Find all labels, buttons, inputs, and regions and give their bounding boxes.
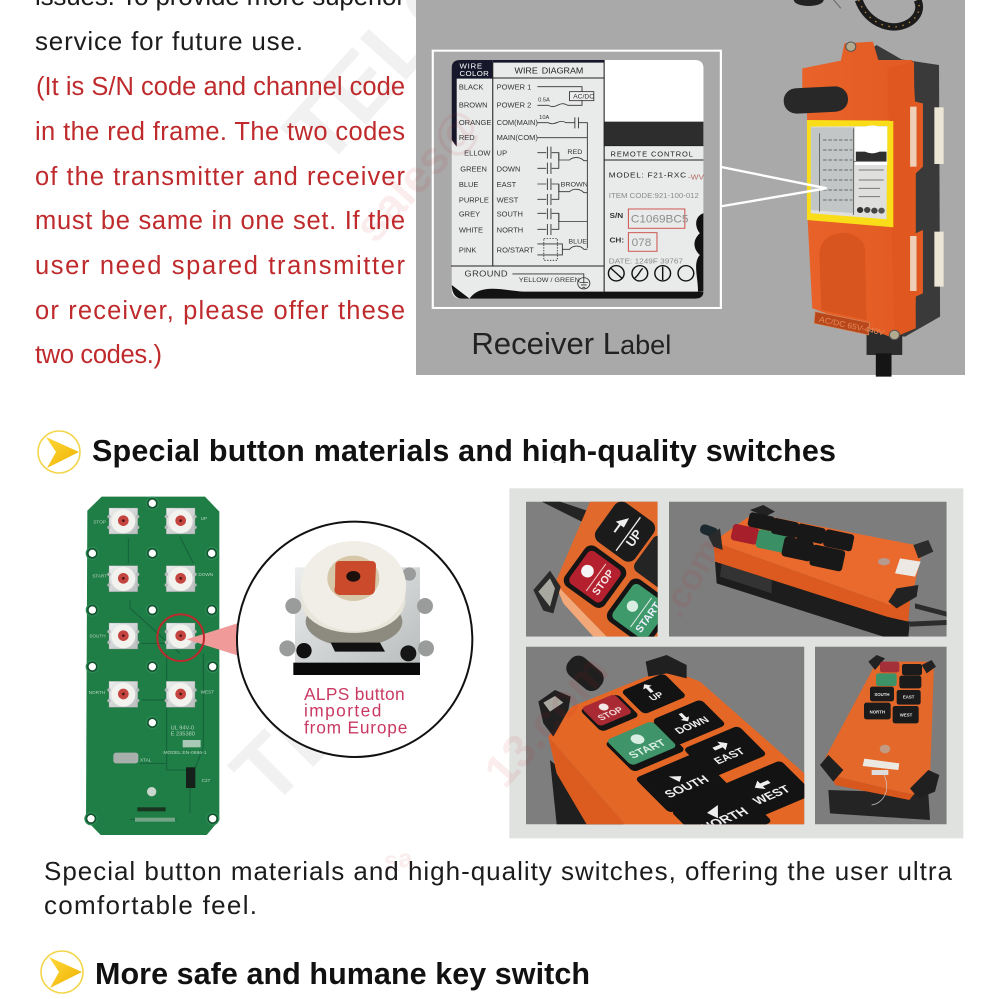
illustration: receiver unit: AC/DC 65V-440V — [818, 315, 886, 338]
callout: enlarged receiver label: 0.5A — [538, 98, 550, 104]
switch labels: XTAL — [140, 758, 152, 763]
icon: yellow arrow bullet — [38, 431, 80, 473]
wire colour list: GREEN — [460, 165, 487, 173]
photo: transmitter keypad angled: STOP — [595, 705, 626, 722]
arrow: callout lines — [719, 167, 827, 207]
photo: close-up of UP STOP START — [526, 502, 658, 637]
switch labels: STOP — [93, 520, 106, 525]
switch labels: NORTH — [89, 690, 105, 695]
photo: transmitter keypad angled: DOWN — [673, 715, 712, 736]
text block: red code note: user need spared transmitter — [35, 252, 406, 280]
function list: RO/START — [497, 246, 534, 254]
wire colour list: ELLOW — [464, 149, 491, 157]
caption: ALPS button — [304, 684, 407, 737]
panel: receiver label — [416, 0, 965, 377]
illustration: receiver unit — [783, 42, 944, 377]
function list: COM(MAIN) — [497, 118, 538, 127]
body text: button description: Special button materials and high-quality switches, offering the user ultra — [44, 856, 953, 886]
icon: coiled antenna cable — [794, 0, 919, 27]
switch labels: SOUTH — [89, 633, 106, 638]
function list: WEST — [497, 196, 519, 204]
highlight: red ring around switch — [157, 614, 204, 661]
text block: red code note: or receiver, please offer these — [35, 297, 405, 325]
photo: transmitter keypad angled: SOUTH — [661, 773, 712, 800]
highlight: S/N code: C1069BC5 — [631, 214, 688, 225]
circuit board — [84, 497, 219, 835]
switch labels: MODEL:EN-0866-1 — [163, 750, 207, 756]
callout: enlarged receiver label: BROWN — [561, 181, 588, 188]
photo: close-up of UP STOP START: STOP — [590, 568, 617, 598]
caption: ALPS button: imported — [304, 701, 381, 721]
wire colour list: BLACK — [459, 83, 484, 92]
wire colour list: ORANGE — [459, 118, 491, 127]
switch labels: UP — [201, 516, 207, 521]
highlight: channel code: 078 — [632, 237, 651, 249]
switch labels: DOWN — [198, 572, 213, 577]
callout: ALPS button magnified — [237, 522, 472, 757]
watermark: 13.com — [474, 644, 619, 797]
callout: enlarged receiver label — [433, 51, 721, 308]
function list: DOWN — [497, 165, 520, 173]
watermark: .com — [651, 531, 729, 624]
watermark — [344, 98, 729, 876]
text block: red code note: of the transmitter and receiver — [35, 163, 406, 191]
callout: enlarged receiver label: MODEL: F21-RXC — [609, 171, 687, 179]
function list: POWER 1 — [497, 83, 531, 92]
callout wedge — [187, 623, 237, 655]
callout: enlarged receiver label: REMOTE CONTROL — [611, 150, 694, 158]
text block: service note: service for future use. — [35, 26, 303, 56]
switch labels — [89, 516, 214, 783]
highlight: yellow frame on unit — [807, 120, 893, 227]
callout: enlarged receiver label: ITEM CODE:921-100-012 — [609, 191, 699, 200]
panel: button photo collage — [509, 488, 963, 849]
watermark: brand mark: TELE — [213, 591, 447, 824]
wiring diagram — [512, 87, 594, 289]
caption: ALPS button: ALPS button — [304, 684, 405, 704]
photo: transmitter keypad angled — [526, 646, 804, 824]
callout: enlarged receiver label: S/N — [609, 211, 623, 220]
photo: transmitter top view — [815, 647, 947, 824]
function list — [497, 83, 538, 254]
text block: red code note: (It is S/N code and channel code — [36, 73, 405, 101]
function list: MAIN(COM) — [497, 133, 538, 142]
text block: red code note: in the red frame. The two codes — [35, 118, 405, 146]
callout: enlarged receiver label: RED — [567, 149, 582, 156]
function list: SOUTH — [497, 210, 523, 219]
certification icons — [608, 266, 694, 281]
switch labels: C27 — [202, 778, 211, 783]
callout: enlarged receiver label: COLOR — [460, 69, 489, 78]
body text: button description — [44, 856, 953, 920]
body text: button description: comfortable feel. — [44, 890, 257, 920]
wire colour list: GREY — [459, 210, 480, 219]
function list: POWER 2 — [497, 101, 531, 110]
switch labels: UL 94V-0 — [171, 725, 194, 731]
wire colour list: BLUE — [459, 180, 479, 189]
text block: red code note — [35, 73, 406, 369]
wire colour list: RED — [459, 133, 475, 142]
photo: transmitter side view — [669, 502, 947, 637]
photo: transmitter keypad angled: NORTH — [697, 805, 751, 834]
watermark: sa — [382, 842, 415, 876]
function list: EAST — [497, 180, 517, 189]
switch labels: START — [92, 574, 107, 579]
photo: transmitter top view: EAST — [903, 694, 915, 699]
heading: safe key switch: More safe and humane key switch — [95, 957, 590, 991]
photo: transmitter keypad angled: EAST — [712, 746, 748, 767]
callout: enlarged receiver label: WIRE — [460, 62, 483, 70]
wire colour list: WHITE — [459, 226, 483, 235]
highlight: S/N code — [628, 209, 688, 228]
text block: service note — [35, 0, 405, 56]
switch labels: E 235380 — [171, 732, 195, 738]
photo: transmitter keypad angled: START — [627, 738, 669, 761]
function list: NORTH — [497, 226, 523, 235]
highlight: channel code — [628, 233, 657, 251]
icon: yellow arrow bullet — [41, 951, 83, 993]
illustration: circuit board with ALPS button — [84, 497, 472, 835]
callout: enlarged receiver label: WIRE DIAGRAM — [515, 66, 583, 75]
wire colour list: PURPLE — [459, 196, 489, 204]
watermark: brand mark — [213, 0, 497, 824]
caption: ALPS button: from Europe — [304, 717, 407, 737]
photo: close-up of UP STOP START: UP — [623, 527, 645, 550]
callout: enlarged receiver label: CH: — [609, 236, 624, 244]
photo: transmitter top view: WEST — [900, 713, 913, 718]
caption: receiver label: Receiver Label — [471, 326, 671, 361]
callout: enlarged receiver label: 10A — [539, 115, 550, 121]
text block: red code note: must be same in one set. If the — [35, 207, 405, 235]
callout: enlarged receiver label: DATE: 1249F 39767 — [609, 257, 684, 265]
wire colour list: BROWN — [459, 101, 488, 110]
callout: enlarged receiver label: GROUND — [465, 269, 508, 279]
text block: red code note: two codes.) — [35, 341, 162, 369]
callout: enlarged receiver label: AC/DC — [573, 94, 594, 101]
heading: special button materials: Special button materials and high-quality switches — [92, 434, 836, 468]
switch labels: WEST — [201, 690, 214, 695]
photo: transmitter top view: SOUTH — [874, 692, 890, 697]
function list: UP — [497, 149, 507, 157]
wire colour list: PINK — [459, 246, 477, 254]
photo: transmitter top view: NORTH — [870, 709, 885, 714]
watermark: sales@ — [344, 98, 489, 252]
photo: transmitter keypad angled: WEST — [750, 783, 794, 807]
photo: close-up of UP STOP START: START — [633, 600, 664, 635]
wire colour list — [459, 83, 491, 254]
photo: transmitter keypad angled: UP — [647, 690, 666, 702]
callout: enlarged receiver label: -WV — [688, 173, 705, 181]
callout: enlarged receiver label: YELLOW / GREEN — [519, 277, 580, 284]
callout: enlarged receiver label: BLUE — [568, 239, 587, 246]
